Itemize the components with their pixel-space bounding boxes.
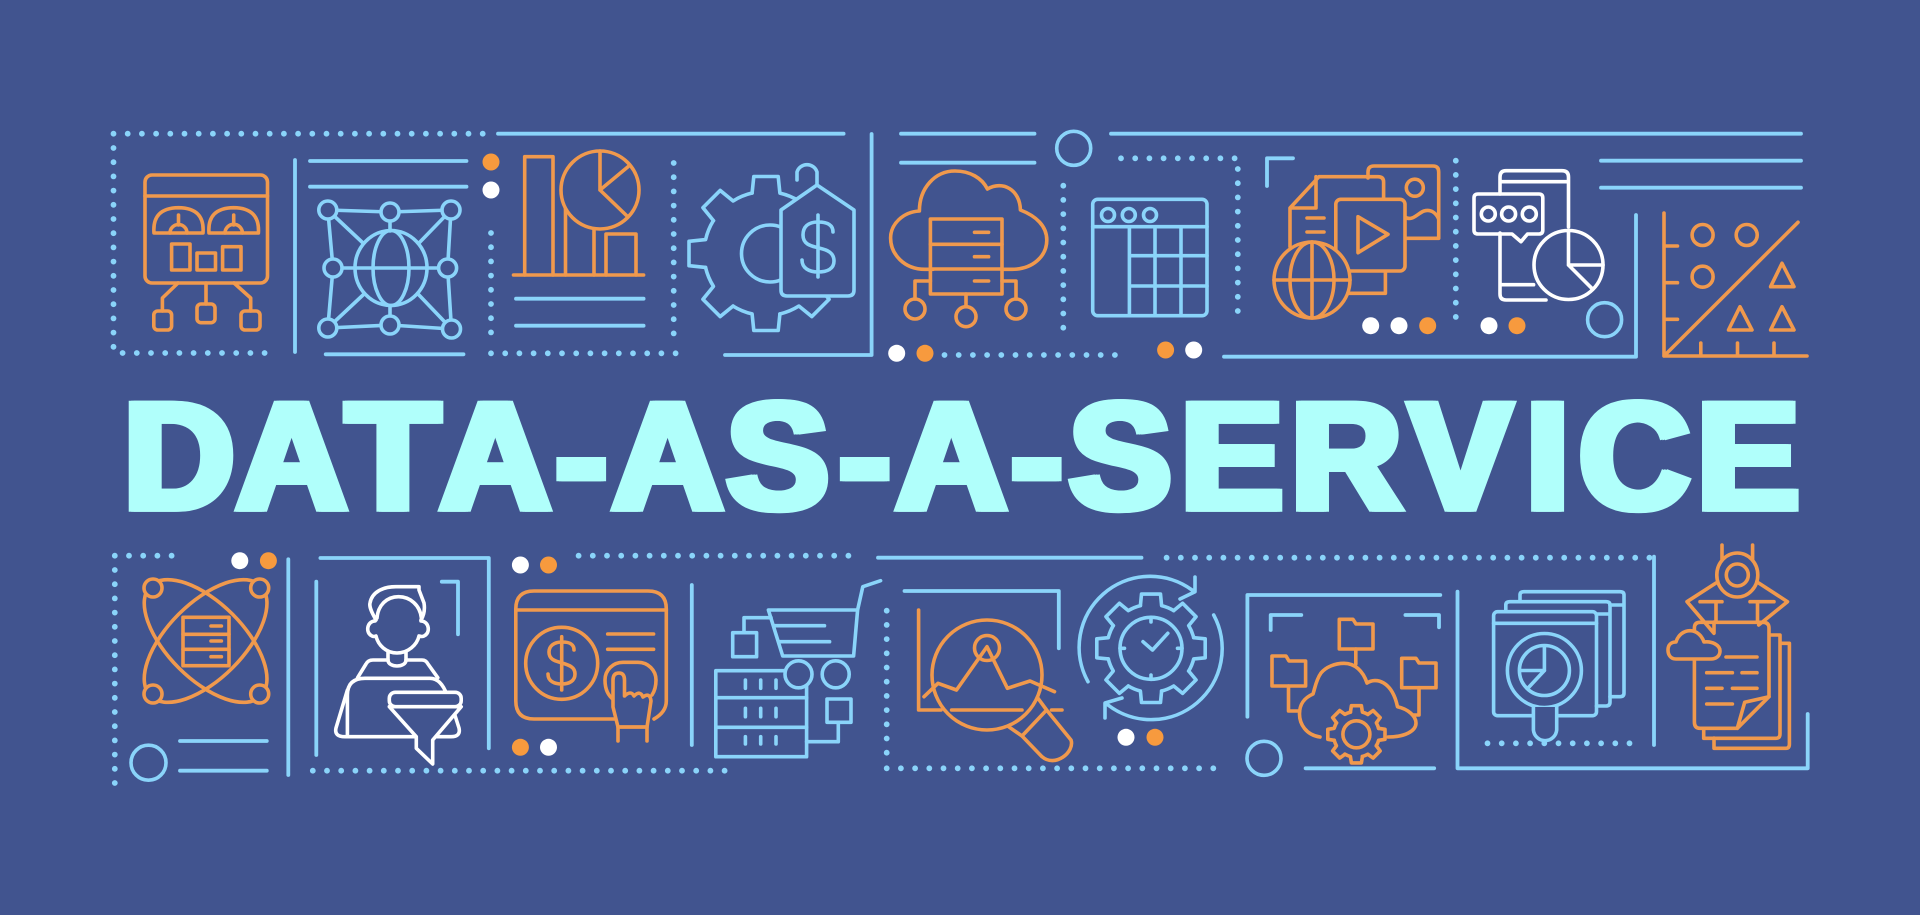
- icon: media files with globe: [1274, 166, 1439, 318]
- icon: atom with server: [124, 559, 288, 723]
- icon: global network: [319, 201, 460, 338]
- icon: percent scatter chart: [1664, 213, 1807, 356]
- icon: data table: [1093, 199, 1207, 316]
- icon: phone with chat bubble and pie chart: [1474, 171, 1603, 300]
- icon: magnifier over mountain chart: [919, 610, 1072, 761]
- icon: online payment with hand: [516, 591, 666, 741]
- icon: gear with price tag: [688, 165, 854, 331]
- icon: person with laptop and filter funnel: [336, 587, 461, 764]
- icon: cloud database: [891, 171, 1047, 327]
- title: DATA-AS-A-SERVICE: [124, 372, 1799, 542]
- icon: bar and pie chart: [514, 151, 644, 275]
- icon: gear with clock and cycle arrows: [1079, 576, 1222, 720]
- icon: cloud with folders and gear: [1272, 619, 1436, 763]
- icon: robotic arm with documents: [1668, 545, 1789, 748]
- icon: server with shopping cart: [716, 581, 881, 757]
- icon: dashboard with gauges: [145, 175, 268, 330]
- icon: stacked reports with magnifier: [1494, 592, 1624, 741]
